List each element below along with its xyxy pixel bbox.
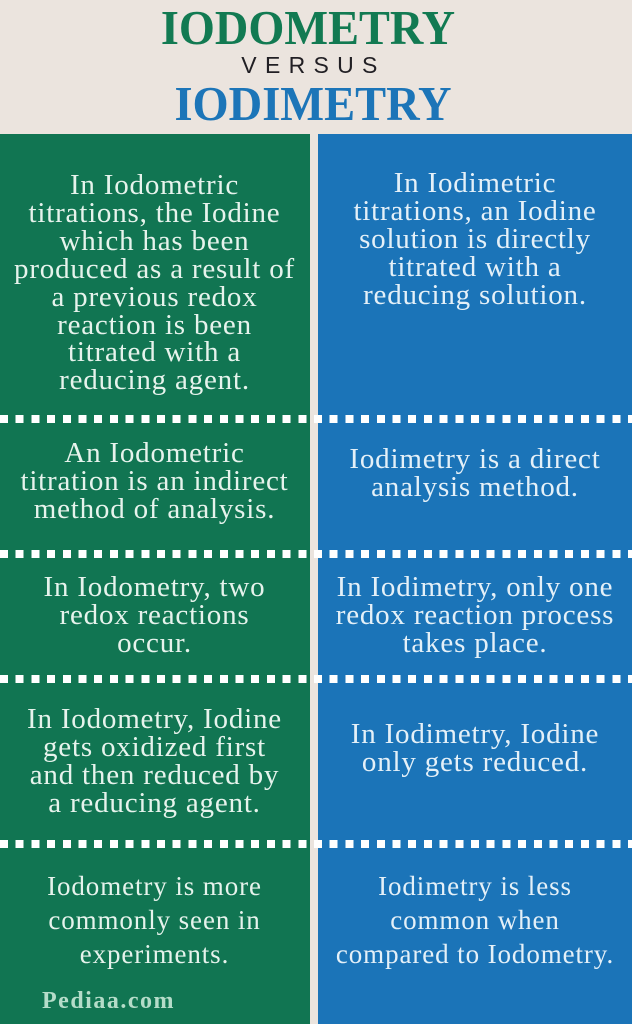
text: iodometry row 4 xyxy=(27,703,282,819)
text: iodometry row 1: a previous redox xyxy=(51,281,258,313)
divider dots 3 xyxy=(0,675,632,683)
text: iodometry row 4: and then reduced by xyxy=(30,759,279,791)
text: iodometry row 5 xyxy=(47,871,262,969)
text: iodimetry row 5: common when xyxy=(390,905,560,935)
text: iodimetry row 1: In Iodimetric xyxy=(394,167,556,199)
text: iodometry row 2: method of analysis. xyxy=(34,493,275,525)
text: iodimetry row 4 xyxy=(351,718,599,778)
text: iodometry row 1: titrated with a xyxy=(68,336,241,368)
text: iodometry row 1: In Iodometric xyxy=(70,169,239,201)
text: iodometry row 4: In Iodometry, Iodine xyxy=(27,703,282,735)
divider dots 1 xyxy=(0,415,632,423)
text: iodimetry row 1: titrations, an Iodine xyxy=(353,195,597,227)
text: iodometry row 5: experiments. xyxy=(80,939,229,969)
text: iodimetry row 1: titrated with a xyxy=(388,251,562,283)
text: iodometry row 3: occur. xyxy=(117,627,192,659)
text: iodometry row 1: which has been xyxy=(60,225,249,257)
subtitle: versus: VERSUS xyxy=(241,52,386,78)
text: iodimetry row 2: Iodimetry is a direct xyxy=(349,443,601,475)
text: iodometry row 3: In Iodometry, two xyxy=(44,571,265,603)
text: iodimetry row 2 xyxy=(349,443,601,503)
divider dots 2 xyxy=(0,550,632,558)
text: iodimetry row 3: In Iodimetry, only one xyxy=(337,571,613,603)
panel: iodometry column xyxy=(0,134,310,1024)
logo: Pediaa.com: Pediaa.com xyxy=(42,988,175,1014)
text: iodimetry row 3 xyxy=(336,571,614,659)
panel: iodimetry column xyxy=(318,134,632,1024)
text: iodometry row 1 xyxy=(14,169,295,396)
text: iodometry row 5: commonly seen in xyxy=(48,905,261,935)
text: iodimetry row 1: solution is directly xyxy=(359,223,591,255)
text: iodometry row 4: gets oxidized first xyxy=(43,731,266,763)
text: iodometry row 2: titration is an indirect xyxy=(20,465,289,497)
text: iodometry row 1: produced as a result of xyxy=(14,253,295,285)
text: iodimetry row 5 xyxy=(336,871,614,969)
text: iodimetry row 1: reducing solution. xyxy=(363,279,587,311)
text: iodimetry row 5: Iodimetry is less xyxy=(378,871,572,901)
text: iodometry row 1: reducing agent. xyxy=(59,364,250,396)
text: iodimetry row 3: takes place. xyxy=(403,627,547,659)
text: iodometry row 3 xyxy=(44,571,265,659)
text: iodimetry row 1 xyxy=(353,167,597,311)
divider dots 4 xyxy=(0,840,632,848)
text: iodometry row 3: redox reactions xyxy=(60,599,249,631)
text: iodimetry row 5: compared to Iodometry. xyxy=(336,939,614,969)
text: iodometry row 1: reaction is been xyxy=(57,309,252,341)
text: iodometry row 5: Iodometry is more xyxy=(47,871,262,901)
text: iodimetry row 3: redox reaction process xyxy=(336,599,614,631)
text: iodometry row 1: titrations, the Iodine xyxy=(29,197,280,229)
text: iodometry row 2 xyxy=(20,437,289,525)
title: Iodometry: IODOMETRY xyxy=(160,0,455,55)
text: iodometry row 4: a reducing agent. xyxy=(48,787,261,819)
title: Iodimetry: IODIMETRY xyxy=(174,76,452,131)
text: iodimetry row 2: analysis method. xyxy=(371,471,579,503)
text: iodimetry row 4: only gets reduced. xyxy=(362,746,588,778)
text: iodometry row 2: An Iodometric xyxy=(64,437,245,469)
text: iodimetry row 4: In Iodimetry, Iodine xyxy=(351,718,599,750)
